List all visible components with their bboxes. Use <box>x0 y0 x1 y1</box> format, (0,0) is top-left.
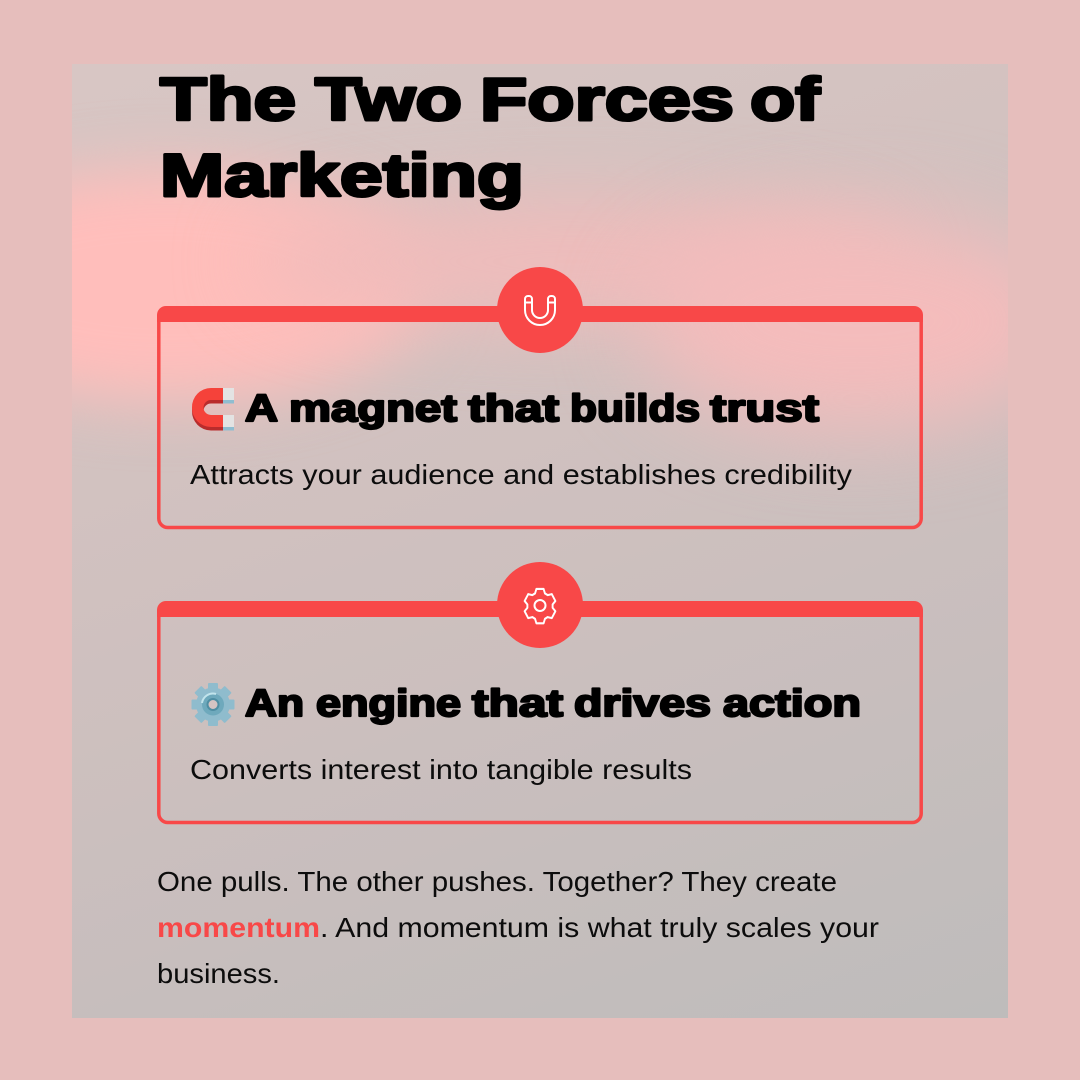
closing paragraph: One pulls. The other pushes. Together? They create <box>157 866 837 897</box>
card heading: builds <box>570 388 700 430</box>
icon: magnet emoji <box>192 388 234 430</box>
closing paragraph: . And momentum is what truly scales your <box>320 912 879 943</box>
card body text: Converts interest into tangible results <box>190 754 692 785</box>
card heading: that <box>468 388 559 430</box>
card heading: An <box>245 683 304 725</box>
card heading: trust <box>710 388 819 430</box>
card heading: engine <box>316 683 461 725</box>
title: Two <box>315 66 462 133</box>
title <box>160 66 821 209</box>
title: of <box>750 66 821 133</box>
title: Marketing <box>160 142 524 209</box>
panel: engine card <box>157 562 923 822</box>
closing paragraph: momentum <box>157 912 320 943</box>
card body text: Attracts your audience and establishes credibility <box>190 459 852 490</box>
card heading <box>245 388 819 430</box>
closing paragraph: business. <box>157 958 280 989</box>
title: The <box>160 66 296 133</box>
card top bar <box>157 601 923 617</box>
icon: gear emoji <box>192 683 234 726</box>
title: Forces <box>480 66 734 133</box>
panel: magnet card <box>157 267 923 528</box>
background panel <box>72 64 1008 1018</box>
icon: gear badge <box>497 562 583 648</box>
card heading <box>245 683 861 725</box>
card top bar <box>157 306 923 322</box>
card heading: magnet <box>289 388 457 430</box>
icon: magnet badge <box>497 267 583 353</box>
card heading: drives <box>574 683 711 725</box>
card heading: that <box>472 683 563 725</box>
card heading: action <box>723 683 861 725</box>
card heading: A <box>245 388 278 430</box>
closing paragraph <box>157 866 879 989</box>
